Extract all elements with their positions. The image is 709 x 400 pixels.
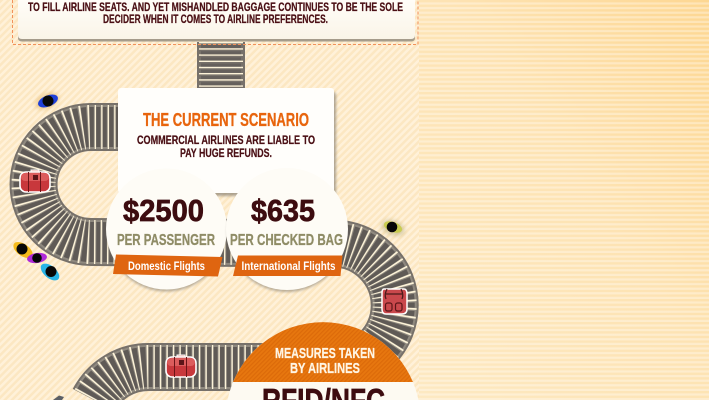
unit label: PER CHECKED BAG	[230, 232, 343, 249]
person: purple	[26, 252, 48, 264]
amount: $635	[251, 193, 315, 228]
icon: red backpack	[382, 289, 407, 314]
ribbon label: Domestic Flights	[128, 259, 205, 273]
person: yellow	[11, 239, 35, 261]
scenario description: COMMERCIAL AIRLINES ARE LIABLE TO	[137, 133, 315, 147]
unit label: PER PASSENGER	[117, 232, 215, 249]
intro text	[28, 2, 403, 26]
person: green	[379, 217, 407, 239]
ribbon label: International Flights	[242, 259, 336, 273]
scenario description: PAY HUGE REFUNDS.	[180, 146, 272, 160]
person: cyan	[38, 260, 62, 284]
heading: the current scenario: THE CURRENT SCENARIO	[143, 110, 309, 130]
conveyor belt: vertical section	[197, 42, 245, 92]
icon: red suitcase on left curve	[20, 170, 50, 192]
right background	[419, 0, 709, 400]
stat: international flights	[226, 168, 348, 292]
panel: measures taken by airlines	[228, 322, 418, 400]
left background	[0, 0, 419, 400]
person: grey, partly cut off	[53, 396, 64, 400]
ribbon	[113, 254, 222, 276]
intro text: TO FILL AIRLINE SEATS. AND YET MISHANDLED BAGGAGE CONTINUES TO BE THE SOLE	[28, 2, 403, 14]
panel: intro card	[12, 0, 418, 44]
heading: measures taken: MEASURES TAKEN	[275, 346, 375, 362]
conveyor belt: winding section	[34, 127, 395, 400]
scenario description	[137, 133, 315, 160]
stat: domestic flights	[106, 168, 227, 292]
heading: measures taken	[275, 346, 375, 377]
ribbon	[233, 256, 342, 276]
person: blue	[33, 90, 61, 112]
panel: the current scenario	[118, 88, 336, 196]
amount: $2500	[123, 193, 204, 228]
intro text: DECIDER WHEN IT COMES TO AIRLINE PREFERENCES.	[103, 14, 328, 26]
icon: red suitcase on lower belt	[166, 355, 196, 377]
heading: measures taken: BY AIRLINES	[290, 361, 360, 377]
